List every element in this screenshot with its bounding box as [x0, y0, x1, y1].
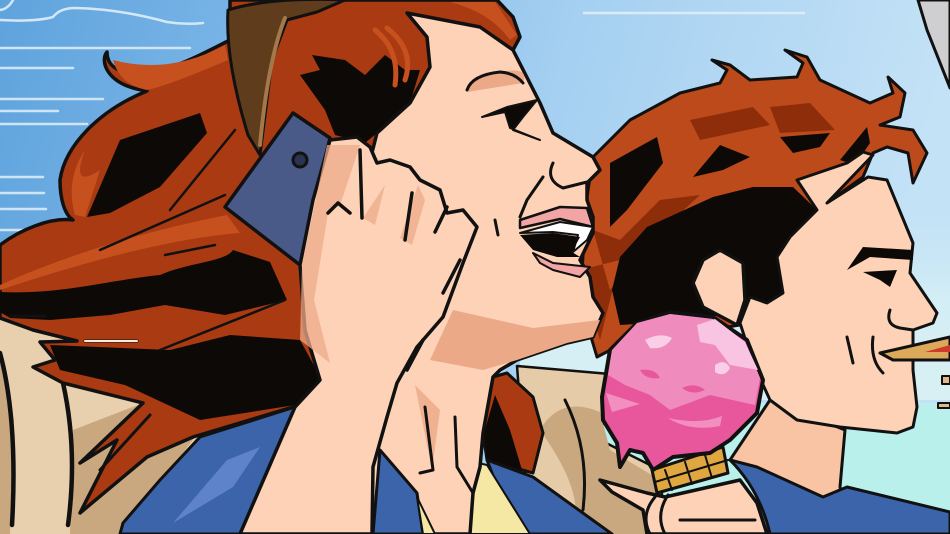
ice cream cone	[652, 447, 728, 493]
man's face	[740, 152, 937, 433]
woman's lower jacket and shirt	[373, 450, 435, 534]
woman's jacket	[120, 407, 295, 534]
pizza slice	[880, 337, 950, 408]
phone	[225, 113, 450, 265]
woman's hair	[0, 0, 520, 513]
hand holding cone	[600, 480, 767, 534]
left car seat	[0, 320, 300, 534]
right car seat	[517, 366, 665, 534]
sunglasses on head	[228, 0, 345, 155]
man's jacket	[730, 460, 950, 534]
woman's face and neck	[360, 13, 603, 534]
phone camera	[293, 153, 307, 167]
man's ear	[693, 250, 745, 325]
woman's hand and arm	[240, 137, 477, 534]
woman's open mouth	[520, 207, 593, 277]
car window frame	[918, 0, 950, 88]
hair behind neck	[483, 373, 543, 473]
man's hair	[580, 50, 927, 357]
woman's shirt and jacket front	[465, 460, 612, 534]
ice cream scoop	[602, 312, 763, 470]
man's neck	[730, 400, 848, 520]
